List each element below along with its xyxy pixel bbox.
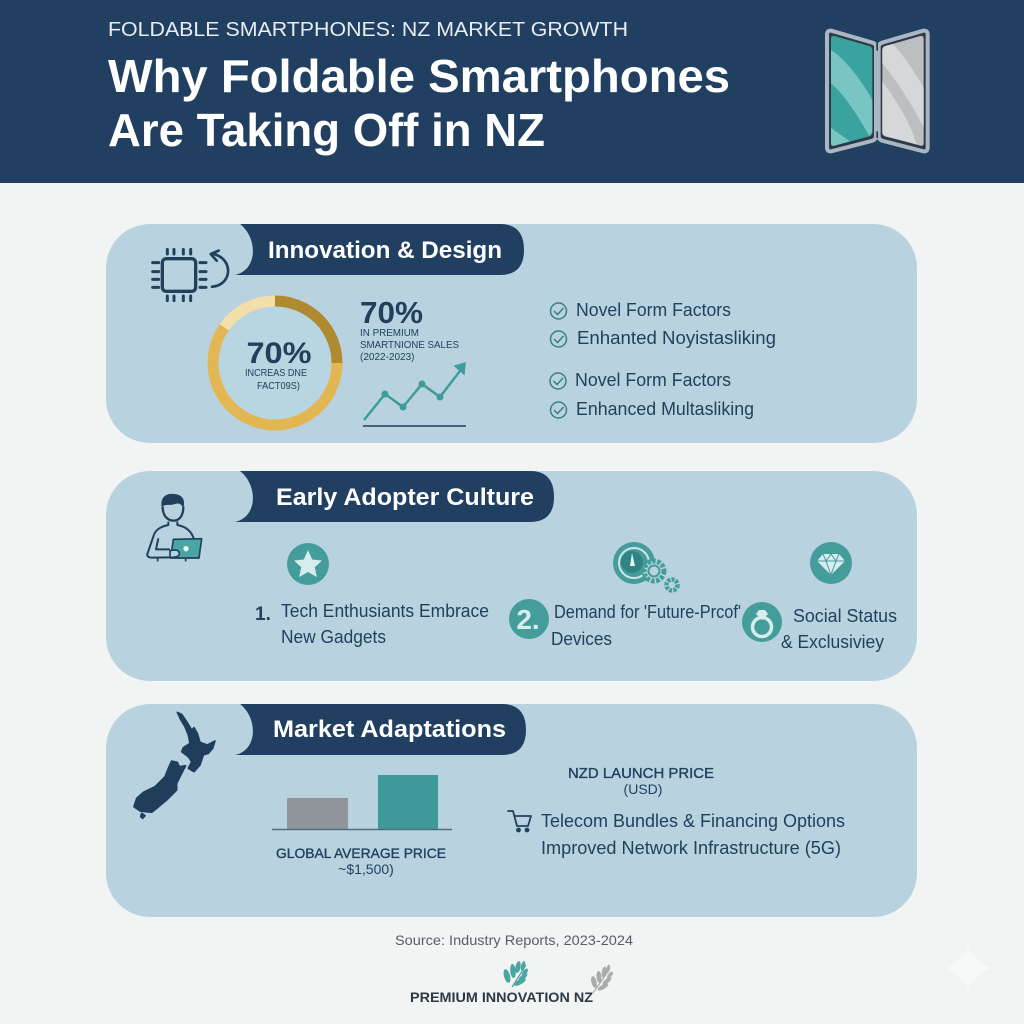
stat: premium sales: (2022-2023) — [360, 352, 414, 363]
icon: foldable phone — [827, 31, 928, 151]
checklist: Enhanted Noyistasliking — [577, 328, 776, 348]
heading tab: early adopter culture: Early Adopter Culture — [276, 484, 534, 511]
title: Why Foldable Smartphones — [108, 50, 730, 102]
item 3 — [742, 542, 897, 652]
icon: star badge — [287, 543, 329, 585]
label: NZD launch price: NZD LAUNCH PRICE — [568, 766, 714, 782]
item 3: Social Status — [793, 606, 897, 626]
icon: sparkle — [945, 945, 992, 992]
label: NZD launch price: (USD) — [624, 781, 662, 797]
item 2: Demand for 'Future-Prcof' — [554, 602, 741, 622]
market bullet text: Telecom Bundles & Financing Options — [541, 811, 845, 831]
donut caption — [245, 367, 307, 392]
label: global average price: GLOBAL AVERAGE PRICE — [276, 845, 446, 861]
number badge 2 — [509, 599, 549, 639]
heading tab: innovation and design: Innovation & Design — [268, 237, 502, 264]
icon: shopping cart — [508, 811, 531, 832]
icon: clock and gears — [613, 542, 678, 590]
icon: ring badge — [742, 602, 782, 642]
checklist: Enhanced Multasliking — [576, 399, 754, 419]
title — [108, 50, 730, 156]
stat: premium sales: 70% — [360, 295, 423, 330]
donut chart — [213, 301, 337, 425]
item 1 — [255, 543, 489, 647]
title: Are Taking Off in NZ — [108, 104, 545, 156]
checklist: Novel Form Factors — [575, 370, 731, 390]
donut value: 70% — [246, 337, 312, 370]
footer brand: PREMIUM INNOVATION NZ — [410, 989, 593, 1005]
market bullet text: Improved Network Infrastructure (5G) — [541, 838, 841, 858]
market bullet text — [541, 811, 845, 858]
line chart — [363, 363, 466, 426]
panel: early adopter culture — [106, 471, 917, 681]
header band — [0, 0, 1024, 183]
heading tab: early adopter culture — [235, 471, 554, 522]
label: global average price — [276, 845, 446, 877]
stat: premium sales: SMARTNIONE SALES — [360, 340, 459, 351]
donut caption: FACT09S) — [257, 380, 300, 392]
item 1: 1. — [255, 604, 271, 625]
heading tab: market adaptations: Market Adaptations — [273, 716, 506, 743]
icon: NZ map — [134, 712, 215, 818]
source note: Source: Industry Reports, 2023-2024 — [395, 932, 633, 948]
stat: premium sales — [360, 295, 459, 363]
label: NZD launch price — [568, 766, 714, 797]
number badge 2: 2. — [516, 604, 540, 635]
item 2 — [509, 542, 741, 649]
icon: person with tablet — [147, 494, 202, 561]
checklist: Novel Form Factors — [576, 300, 731, 320]
panel: innovation and design — [106, 224, 917, 443]
item 2: Devices — [551, 629, 612, 649]
header kicker: FOLDABLE SMARTPHONES: NZ MARKET GROWTH — [108, 18, 628, 41]
donut caption: INCREAS DNE — [245, 367, 307, 379]
icon: chip with arrow — [153, 249, 228, 301]
item 3: & Exclusiviey — [781, 632, 884, 652]
item 1: New Gadgets — [281, 627, 386, 647]
bar chart — [272, 775, 452, 877]
heading tab: market adaptations — [235, 704, 526, 755]
icon: teal fern — [502, 961, 529, 987]
heading tab: innovation and design — [235, 224, 524, 275]
item 1: Tech Enthusiants Embrace — [281, 601, 489, 621]
icon: diamond badge — [810, 542, 852, 584]
checklist — [550, 300, 776, 419]
icon: grey fern — [590, 964, 614, 993]
label: global average price: ~$1,500) — [338, 861, 394, 877]
panel: market adaptations — [106, 704, 917, 917]
stat: premium sales: IN PREMIUM — [360, 328, 419, 339]
